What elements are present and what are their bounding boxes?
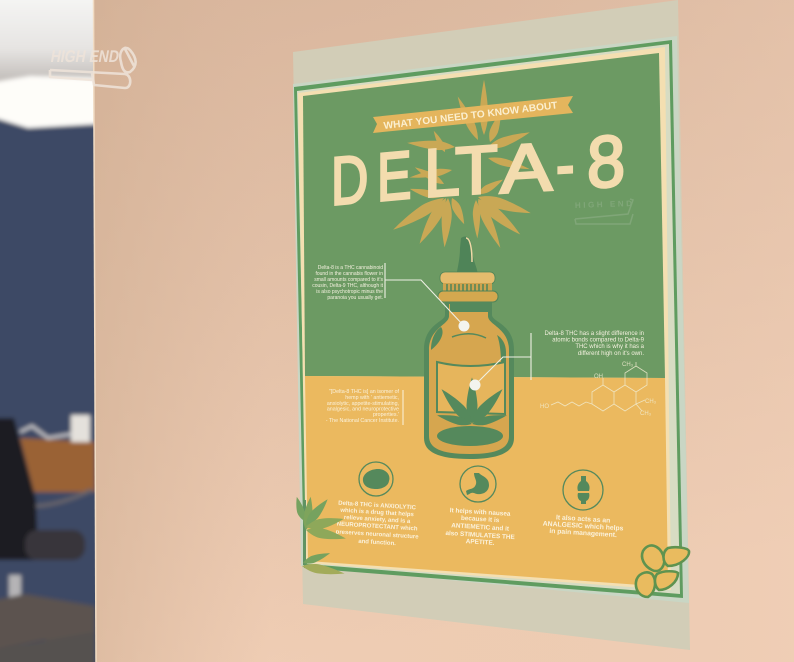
poster — [293, 0, 690, 650]
corner: bottom right seeds — [636, 545, 689, 597]
callout: quote — [326, 389, 403, 425]
benefit: stomach — [445, 466, 516, 547]
upper leaf — [407, 80, 531, 187]
benefit: joint: ANALGESIC which helps — [543, 521, 624, 532]
corner: bottom left leaves — [293, 496, 347, 578]
benefit: joint — [543, 470, 624, 539]
title: DELTA-8: T — [455, 130, 498, 210]
bottle label leaf — [436, 377, 508, 428]
cannabis leaves behind title — [390, 80, 532, 250]
callout: right description — [470, 331, 645, 390]
cream frame — [298, 47, 671, 590]
title: DELTA-8: 8 — [587, 121, 625, 204]
title: DELTA-8: A — [500, 129, 552, 208]
bottle label — [437, 362, 505, 414]
office chair — [0, 418, 92, 650]
benefit: stomach: ANTIEMETIC and it — [451, 522, 510, 533]
benefit: brain: Delta-8 THC is ANXIOLYTIC — [338, 501, 417, 511]
outer green border — [294, 40, 683, 598]
glass amber interior — [429, 304, 509, 454]
title: DELTA-8: E — [377, 136, 411, 216]
faint poster watermark: HIGH END — [575, 199, 632, 210]
title: DELTA-8: D — [331, 140, 368, 220]
callout: left description: paranoia you usually get. — [327, 295, 383, 301]
lower right leaf — [472, 176, 532, 250]
callout: quote: anxiolytic, appetite-stimulating, — [327, 401, 399, 407]
benefit: stomach: APETITE. — [466, 538, 495, 547]
callout: right description: different high on it's own. — [578, 351, 644, 357]
liquid ellipse — [437, 426, 503, 446]
callout: quote: - The National Cancer Institute. — [326, 418, 399, 424]
title: DELTA-8: - — [555, 126, 576, 203]
chemical structure diagram: CH₃ — [622, 362, 634, 368]
panel: green upper field — [303, 53, 665, 378]
callout: right description: atomic bonds compared to Delta-9 — [552, 338, 645, 344]
chemical structure diagram: HO — [540, 404, 549, 410]
benefit: brain: preserves neuronal structure — [335, 529, 419, 541]
benefit: joint: It also acts as an — [556, 514, 610, 525]
callout: quote: properties.' — [373, 412, 399, 418]
benefit: stomach: because it is — [461, 515, 500, 524]
benefit: brain: relieve anxiety, and is a — [344, 515, 411, 525]
cap — [440, 272, 495, 284]
callout: left description: small amounts compared to it's — [314, 277, 383, 283]
glass highlights — [431, 327, 506, 396]
benefit: brain: and function. — [358, 539, 396, 547]
desk — [20, 438, 95, 492]
monitor cable and cup — [20, 415, 90, 442]
chemical structure diagram: CH₃ — [645, 399, 657, 405]
callout: left description: is also psychotropic minus the — [316, 289, 383, 295]
benefit: stomach: It helps with nausea — [450, 507, 511, 518]
background: office scene — [0, 0, 100, 662]
ceiling — [0, 0, 100, 85]
callout: left description: Delta-8 is a THC cannabinoid — [318, 265, 383, 271]
poster paper — [293, 0, 690, 650]
icon: spine joint — [563, 470, 603, 510]
chemical structure diagram: OH — [594, 374, 603, 380]
callout: right description: Delta-8 THC has a slight difference in — [544, 331, 644, 337]
benefit: brain: NEUROPROTECTANT which — [337, 522, 418, 532]
benefit: joint: in pain management. — [549, 528, 617, 539]
icon: stomach — [460, 466, 496, 502]
benefit: stomach: also STIMULATES THE — [445, 530, 516, 541]
title: DELTA-8 — [331, 121, 625, 220]
callout: left description — [312, 263, 470, 332]
callout: quote: analgesic, and neuroprotective — [327, 406, 399, 412]
pale inner mount — [293, 36, 689, 603]
bottle neck and body outline — [424, 302, 514, 459]
faint poster watermark — [575, 199, 633, 224]
callout: left description: found in the cannabis flower in — [315, 271, 383, 277]
benefit: brain: which is a drug that helps — [339, 508, 415, 518]
callout: quote: "[Delta-8 THC is] an isomer of — [329, 389, 400, 395]
logo: HIGH END watermark: HIGH END — [49, 46, 121, 66]
logo: HIGH END watermark — [49, 46, 136, 88]
chemical structure diagram: CH₃ — [640, 411, 652, 417]
title: DELTA-8: L — [424, 134, 460, 212]
rubber bulb — [456, 236, 478, 277]
ceiling light panel — [0, 76, 100, 128]
dropper bottle — [424, 236, 514, 459]
callout: left description: cousin, Delta-9 THC, although it — [312, 283, 384, 289]
lower left leaf — [390, 185, 468, 248]
callout: right description: THC which is why it has a — [575, 344, 645, 350]
icon: brain — [359, 462, 393, 496]
callout: quote: hemp with ' antiemetic, — [345, 395, 399, 401]
ribbon banner: WHAT YOU NEED TO KNOW ABOUT — [383, 100, 558, 132]
floor — [0, 594, 95, 662]
benefit: brain — [335, 462, 419, 547]
chemical structure diagram — [540, 362, 657, 417]
panel: yellow lower field — [305, 376, 668, 587]
